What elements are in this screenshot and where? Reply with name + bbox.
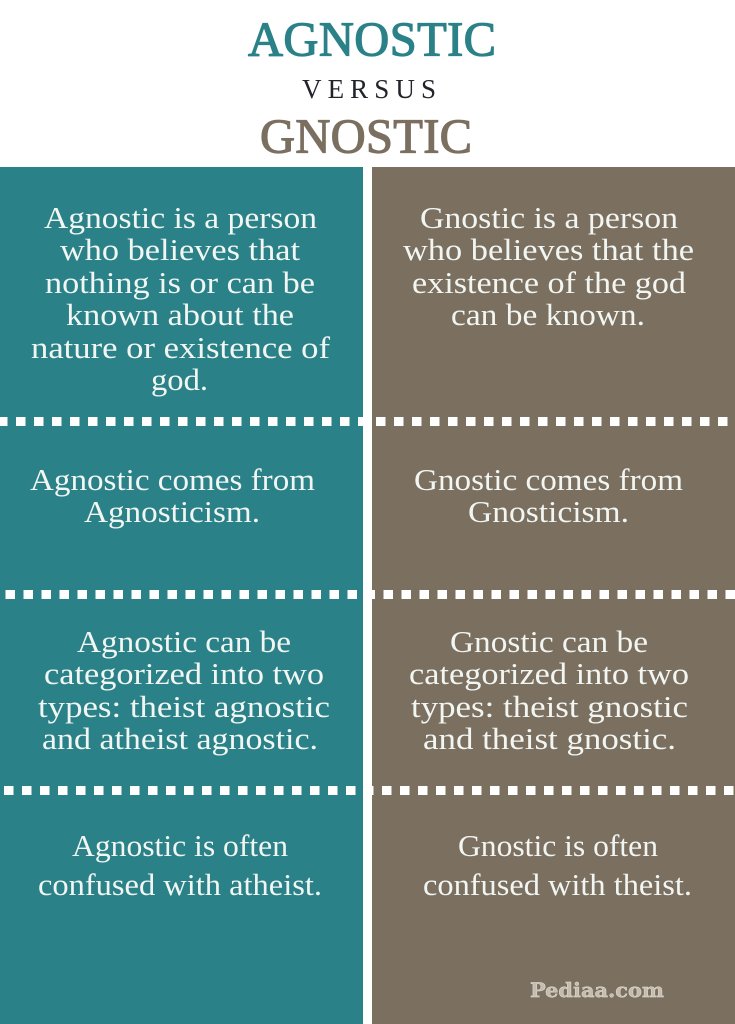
- text: gnostic origin: [414, 462, 683, 529]
- text: gnostic confusion: [423, 828, 692, 902]
- text: gnostic confusion: confused with theist.: [423, 867, 692, 902]
- text: agnostic definition: Agnostic is a person: [44, 200, 318, 235]
- text: gnostic definition: can be known.: [451, 297, 645, 332]
- text: gnostic origin: Gnosticism.: [468, 494, 629, 529]
- text: gnostic types: and theist gnostic.: [423, 721, 676, 756]
- text: gnostic definition: who believes that the: [403, 232, 694, 267]
- panel: gnostic column: [372, 167, 735, 1024]
- text: gnostic origin: Gnostic comes from: [414, 462, 683, 497]
- text: gnostic confusion: Gnostic is often: [458, 828, 659, 863]
- text: agnostic definition: known about the: [66, 297, 294, 332]
- text: gnostic definition: existence of the god: [412, 265, 687, 300]
- text: agnostic definition: nature or existence of: [31, 330, 331, 365]
- column background: gnostic: [372, 167, 735, 1024]
- title: Gnostic: GNOSTIC: [260, 110, 472, 164]
- text: agnostic types: and atheist agnostic.: [42, 721, 318, 756]
- text: gnostic types: Gnostic can be: [450, 624, 648, 659]
- text: agnostic types: [38, 624, 330, 756]
- text: gnostic types: types: theist gnostic: [411, 689, 688, 724]
- text: gnostic definition: [403, 200, 694, 332]
- text: agnostic confusion: confused with atheist.: [38, 867, 322, 902]
- title: Agnostic: AGNOSTIC: [248, 14, 496, 66]
- text: agnostic definition: [31, 200, 331, 397]
- subtitle: versus: VERSUS: [302, 74, 436, 104]
- text: agnostic types: categorized into two: [44, 656, 324, 691]
- text: agnostic origin: Agnostic comes from: [30, 462, 315, 497]
- text: agnostic definition: nothing is or can be: [45, 265, 315, 300]
- logo: Pediaa.com: Pediaa.com: [530, 978, 664, 1002]
- text: agnostic confusion: Agnostic is often: [72, 828, 289, 863]
- text: agnostic confusion: [38, 828, 322, 902]
- text: gnostic definition: Gnostic is a person: [420, 200, 679, 235]
- text: gnostic types: categorized into two: [409, 656, 689, 691]
- text: agnostic origin: Agnosticism.: [84, 494, 260, 529]
- text: agnostic definition: god.: [151, 362, 208, 397]
- text: agnostic types: Agnostic can be: [77, 624, 291, 659]
- text: agnostic definition: who believes that: [60, 232, 300, 267]
- text: gnostic types: [409, 624, 689, 756]
- text: agnostic types: types: theist agnostic: [38, 689, 330, 724]
- column background: agnostic: [0, 167, 363, 1024]
- panel: agnostic column: [0, 167, 363, 1024]
- text: agnostic origin: [30, 462, 315, 529]
